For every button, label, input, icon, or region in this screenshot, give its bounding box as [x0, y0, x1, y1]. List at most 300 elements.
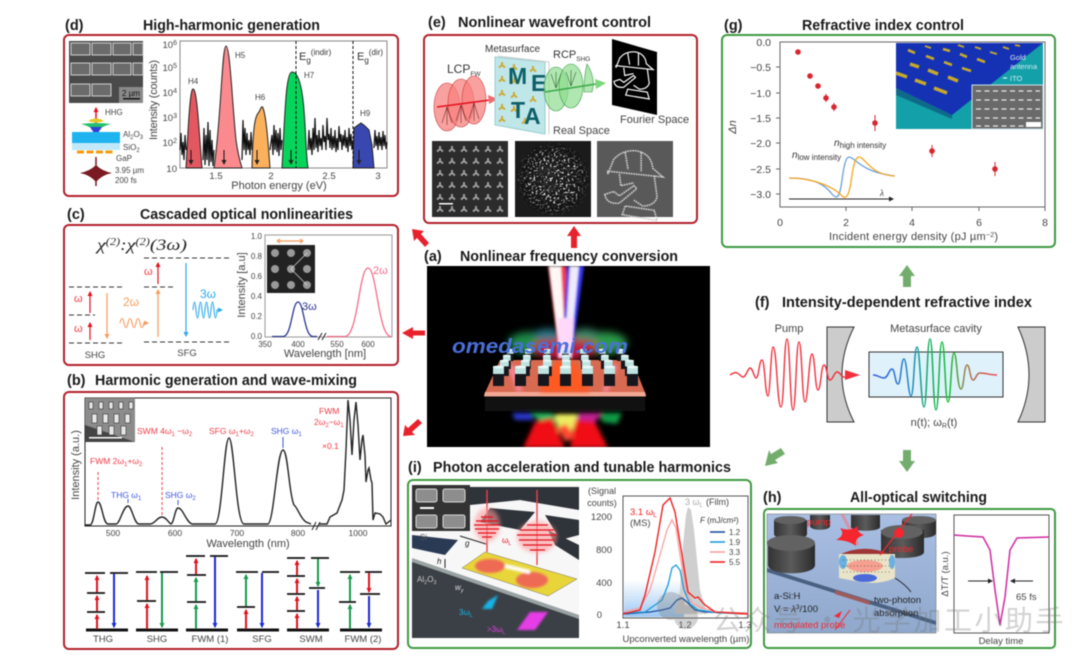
wave-mixing spectrum chart: −ω	[329, 417, 341, 427]
panel e: nonlinear wavefront control: Metasurface	[485, 44, 540, 55]
harmonic spectrum chart: 10	[163, 63, 173, 74]
wave-mixing spectrum chart: SWM 4ω	[137, 426, 172, 436]
panel h label: (h)	[763, 490, 782, 506]
wave-mixing spectrum chart: 500	[106, 528, 120, 538]
wave-mixing spectrum chart: ×0.1	[322, 441, 339, 451]
3-omega wave	[193, 302, 222, 318]
switching device render: probe	[889, 544, 913, 555]
substrate	[412, 560, 579, 638]
real space speckle image	[515, 141, 591, 217]
legend: 1.2	[729, 528, 741, 537]
delta-n chart: −2	[986, 232, 994, 239]
HHG device schematic: 2	[136, 148, 140, 154]
delta-n chart	[727, 37, 1048, 243]
harmonic spectrum chart: E	[357, 51, 364, 63]
switching device render: 3	[796, 604, 800, 611]
harmonic spectrum chart: 3	[375, 171, 381, 182]
panel g label: (g)	[724, 18, 743, 34]
metasurface render	[427, 266, 710, 448]
device render: y	[460, 588, 465, 594]
energy level diagram: ω	[74, 323, 83, 335]
energy level diagram	[69, 258, 231, 361]
harmonic spectrum chart: Intensity (counts)	[148, 60, 160, 140]
energy level diagram: ω	[144, 266, 153, 278]
wave-mixing spectrum chart: 1	[235, 432, 239, 438]
harmonic spectrum chart: (dir)	[369, 48, 383, 57]
signal chart: Upconverted wavelength (µm)	[623, 634, 749, 645]
device render: L	[508, 541, 511, 547]
wave-mixing spectrum chart: +ω	[127, 456, 139, 466]
cascaded spectrum chart: 0.4	[251, 292, 263, 301]
chi formula: (2)	[135, 237, 151, 248]
transition level diagrams: SHG	[147, 634, 167, 645]
transmission chart	[940, 515, 1049, 647]
signal chart: L	[700, 503, 704, 509]
device render: O	[427, 575, 433, 584]
cut-away field map	[839, 549, 895, 583]
wave-mixing spectrum chart: 1	[298, 432, 302, 438]
right mirror	[1018, 327, 1045, 422]
wave-mixing spectrum chart: 800	[291, 528, 305, 538]
panel c frame	[64, 225, 398, 365]
metasurface slab: T	[511, 97, 525, 123]
legend	[700, 516, 741, 567]
plate	[462, 552, 577, 596]
waveguide	[767, 568, 936, 625]
panel e label: (e)	[428, 15, 446, 31]
level dashes	[85, 556, 382, 612]
wave-mixing spectrum chart: 1000	[349, 528, 368, 538]
SEM inset on antenna image	[972, 85, 1043, 129]
harmonic spectrum chart: E	[299, 51, 306, 63]
delta-n chart: −1.0	[750, 88, 771, 100]
harmonic spectrum chart: 6	[173, 40, 177, 47]
device render: Al	[417, 575, 424, 584]
HHG device schematic: 3	[140, 135, 144, 141]
resonance curves inset: n	[834, 138, 840, 149]
harmonic spectrum chart: g	[364, 56, 369, 65]
chi formula: (2)	[106, 237, 121, 248]
signal chart: 800	[596, 545, 612, 556]
peak H9	[353, 123, 374, 168]
delta-n chart: 8	[1042, 217, 1048, 229]
pink curve 3.3	[623, 520, 748, 613]
switching device render	[767, 514, 936, 633]
panel f: intensity-dependent refractive index: Metasurface cavity	[890, 323, 982, 335]
harmonic spectrum chart: 4	[173, 88, 177, 95]
panel b label: (b)	[67, 373, 86, 389]
switching device render: modulated probe	[774, 620, 845, 631]
spectrum trace	[85, 400, 391, 525]
wave-mixing spectrum chart: −ω	[175, 426, 189, 436]
panel e: nonlinear wavefront control: Fourier Space	[620, 114, 689, 126]
dark blue curve 1.2	[623, 598, 748, 614]
transmission chart: Delay time	[979, 636, 1023, 647]
transition level diagrams: FWM (1)	[192, 634, 228, 645]
red LCP helix	[434, 76, 498, 131]
harmonic spectrum chart	[148, 40, 387, 192]
switching device render: pump	[807, 517, 831, 528]
metasurface slab	[495, 56, 549, 134]
delta-n chart: 0	[777, 217, 783, 229]
panel f: intensity-dependent refractive index: R	[942, 423, 947, 430]
signal chart: L	[653, 512, 657, 519]
panel h: all-optical switching	[763, 490, 1055, 648]
panel c label: (c)	[67, 207, 85, 223]
SEM of tripod array	[432, 141, 508, 217]
panel h heading: All-optical switching	[850, 490, 987, 506]
device render: Si	[420, 533, 427, 542]
HHG device schematic: Al	[123, 130, 130, 139]
wave-mixing spectrum chart: 2	[325, 423, 329, 429]
arrow to panel h	[899, 450, 915, 472]
peak H7	[282, 72, 308, 168]
HHG device schematic: HHG	[105, 108, 123, 117]
antenna array inset: antenna	[1010, 62, 1038, 71]
signal chart: 0	[597, 610, 602, 621]
panel e: nonlinear wavefront control: LCP	[447, 62, 470, 76]
device render: L	[502, 630, 505, 636]
substrate top plate	[484, 360, 646, 395]
harmonic spectrum chart: (indir)	[311, 48, 332, 57]
antenna array inset	[896, 43, 1043, 129]
signal chart	[587, 486, 752, 645]
wave-mixing spectrum chart: 1	[124, 462, 128, 468]
chi formula: :χ	[120, 237, 137, 254]
delta-n chart: 0.0	[756, 37, 771, 49]
left mirror	[827, 327, 854, 422]
panel d frame	[64, 35, 398, 196]
3-omega peak	[272, 302, 317, 336]
harmonic spectrum chart: H5	[235, 51, 246, 60]
HHG device schematic	[72, 108, 144, 186]
device render: 3ω	[459, 608, 470, 617]
signal chart: 3.1 ω	[630, 507, 653, 518]
cylinders	[768, 515, 936, 573]
rainbow diffraction below	[512, 413, 622, 448]
HHG device schematic: SiO	[123, 143, 136, 152]
signal chart: 1.1	[616, 620, 630, 631]
delta-n chart: −2.0	[750, 138, 771, 150]
harmonic spectrum chart: Photon energy (eV)	[231, 180, 327, 192]
device render: 2	[424, 580, 427, 586]
resonance curves inset: high intensity	[840, 141, 886, 150]
panel i heading: Photon acceleration and tunable harmonics	[433, 460, 731, 476]
legend: 5.5	[729, 558, 741, 567]
harmonic spectrum chart: 5	[173, 63, 177, 70]
background dark slabs	[412, 487, 579, 560]
pump and probe pulses	[834, 514, 912, 630]
arrow to panel b	[403, 419, 422, 436]
harmonic spectrum chart: 10	[166, 164, 177, 175]
peak H4	[186, 89, 202, 168]
wave-mixing spectrum chart: Intensity (a.u.)	[70, 430, 82, 500]
device render: h	[437, 557, 442, 566]
cascaded spectrum chart	[236, 232, 392, 360]
resonance curves inset: λ	[879, 188, 884, 198]
panel g heading: Refractive index control	[802, 18, 964, 34]
panel d label: (d)	[65, 18, 84, 34]
real space speckle image: ME	[538, 164, 558, 179]
arrow to panel i	[765, 448, 785, 466]
arrow to panel e	[567, 226, 581, 248]
SHG arrows	[147, 573, 162, 629]
harmonic spectrum chart: H6	[255, 93, 266, 102]
SEM inset	[412, 485, 470, 531]
harmonic spectrum chart: 3	[173, 113, 177, 120]
delta-n chart: −2.5	[750, 164, 771, 176]
switching device render: two-photon	[874, 595, 921, 606]
harmonic spectrum chart: 10	[163, 138, 173, 149]
device render: L	[470, 613, 473, 619]
legend: 1.9	[729, 538, 741, 547]
signal chart: counts)	[587, 498, 617, 508]
panel g frame	[722, 35, 1055, 247]
delta-n chart: Δn	[727, 120, 739, 135]
antenna array inset: Gold	[1010, 53, 1026, 62]
device render: w	[455, 583, 461, 592]
wave-mixing spectrum chart: +ω	[239, 426, 251, 436]
chi formula: (3ω)	[150, 237, 187, 254]
switching device render: V = λ	[774, 604, 796, 615]
legend: 3.3	[729, 548, 741, 557]
HHG device schematic: 2	[130, 135, 134, 141]
level ground lines	[86, 628, 382, 632]
panel e: nonlinear wavefront control: FW	[470, 71, 481, 78]
SEM image: 2 µm	[122, 89, 140, 98]
panel d: high-harmonic generation	[64, 18, 398, 196]
panel f label: (f)	[755, 295, 770, 311]
FWM 1 arrows	[196, 557, 215, 629]
energy level diagram: SFG	[177, 348, 197, 359]
signal chart: 3 ω	[685, 497, 700, 507]
transition level diagrams: THG	[93, 634, 113, 645]
red beams and pulses	[474, 490, 557, 565]
panel f: intensity-dependent refractive index: Pump	[775, 323, 803, 335]
signal chart: (MS)	[630, 518, 651, 529]
panel i frame	[408, 480, 751, 648]
data points	[795, 49, 998, 172]
wave-mixing spectrum chart: 2	[189, 432, 193, 438]
SWM arrows	[297, 559, 318, 629]
transmission chart: 65 fs	[1016, 592, 1037, 603]
arrow to panel c	[402, 327, 425, 339]
panel h frame	[764, 509, 1055, 648]
metasurface slab: E	[531, 70, 546, 96]
peak H6	[252, 107, 270, 168]
wave-mixing spectrum chart: 2	[139, 462, 143, 468]
energy level diagram: SHG	[85, 350, 105, 361]
panel b frame	[64, 392, 398, 649]
HHG device schematic: O	[133, 130, 140, 139]
energy level diagram: 2ω	[123, 295, 139, 309]
panel b: harmonic generation and wave-mixing	[64, 373, 398, 649]
cascaded spectrum chart: 0.8	[251, 252, 263, 261]
panel f: intensity-dependent refractive index	[730, 295, 1045, 430]
transition level diagrams: SFG	[252, 634, 272, 645]
wave-mixing spectrum chart: 1	[172, 432, 176, 438]
panel i label: (i)	[408, 460, 422, 476]
metasurface slab: M	[508, 63, 527, 89]
device render	[412, 485, 579, 638]
device render: >3ω	[487, 625, 502, 634]
THG arrows	[97, 574, 114, 629]
FWM 2 arrows	[350, 573, 369, 629]
Fourier space worker panel	[612, 39, 657, 115]
red arrows into panel a	[402, 226, 581, 436]
signal chart: 400	[596, 578, 612, 589]
harmonic spectrum chart: H4	[188, 77, 199, 86]
harmonic spectrum chart: H7	[304, 71, 315, 80]
device render: ω	[502, 536, 508, 545]
panel g: refractive index control	[722, 18, 1055, 247]
watermark: WeChat account: 公众号 · 光学加工小助手	[713, 599, 1066, 639]
panel a heading: Nonlinear frequency conversion	[460, 249, 678, 265]
green RCP helix	[544, 64, 606, 111]
delta-n chart: 2	[843, 217, 849, 229]
harmonic spectrum chart: 2.5	[322, 171, 336, 182]
panel a: nonlinear frequency conversion	[424, 249, 710, 448]
wave-mixing spectrum chart: 2	[192, 496, 196, 502]
back pillar rows	[500, 349, 634, 376]
cascaded spectrum chart: 550	[330, 340, 344, 349]
SEM image	[69, 41, 143, 103]
peak H5	[214, 46, 242, 168]
cascaded spectrum chart: Intensity [a.u]	[236, 252, 248, 318]
panel d heading: High-harmonic generation	[143, 18, 320, 34]
panel f heading: Intensity-dependent refractive index	[782, 295, 1032, 311]
harmonic spectrum chart: 2	[268, 171, 274, 182]
noise floor	[180, 118, 387, 166]
transition level diagrams: FWM (2)	[345, 634, 381, 645]
resonance curves inset	[789, 138, 895, 199]
panel f: intensity-dependent refractive index: n(t); ω	[911, 417, 942, 429]
panel i: photon acceleration and tunable harmonics	[408, 460, 752, 648]
cascaded spectrum chart: 1.0	[251, 232, 263, 241]
signal chart: 1.2	[678, 620, 692, 631]
arrow to panel g	[899, 265, 915, 287]
panel c heading: Cascaded optical nonlinearities	[140, 207, 353, 223]
signal chart: (Film)	[706, 497, 729, 507]
wave-mixing spectrum chart	[70, 398, 391, 550]
panel e: nonlinear wavefront control: RCP	[553, 49, 576, 61]
panel e: nonlinear wavefront control	[424, 15, 697, 223]
wave-mixing spectrum chart: FWM	[319, 406, 339, 416]
harmonic spectrum chart: H9	[360, 109, 371, 118]
harmonic spectrum chart: 1.5	[209, 171, 223, 182]
front pillar row	[493, 366, 638, 386]
film reference peak	[675, 507, 707, 614]
HHG device schematic: 200 fs	[115, 176, 137, 185]
switching device render: a-Si:H	[774, 591, 801, 602]
cascaded spectrum chart: 3ω	[302, 301, 317, 313]
transition level diagrams	[85, 556, 382, 645]
harmonic spectrum chart: 10	[163, 113, 173, 124]
delta-n chart: 6	[976, 217, 982, 229]
panel b heading: Harmonic generation and wave-mixing	[95, 373, 357, 389]
panel e: nonlinear wavefront control: SHG	[576, 56, 590, 63]
panel e: nonlinear wavefront control: Real Space	[553, 125, 610, 137]
delta-n chart: −0.5	[750, 62, 771, 74]
green arrows around panel f	[765, 265, 915, 472]
legend: F (mJ/cm²)	[700, 516, 739, 525]
device render: g	[465, 539, 470, 548]
wave-mixing spectrum chart: THG ω	[111, 490, 138, 500]
nanostructure inset	[267, 245, 315, 293]
harmonic spectrum chart: 10	[163, 88, 173, 99]
panel e frame	[424, 35, 697, 223]
cascaded spectrum chart: 0.2	[251, 312, 263, 321]
metasurface slab: A	[524, 103, 541, 129]
2-omega peak	[327, 268, 391, 336]
panel a label: (a)	[424, 249, 442, 265]
wave-mixing spectrum chart: 700	[230, 528, 244, 538]
panel e heading: Nonlinear wavefront control	[458, 15, 651, 31]
incident and emitted beams	[548, 266, 584, 358]
cascaded spectrum chart: Wavelength [nm]	[284, 348, 366, 360]
wave-mixing spectrum chart: Wavelength (nm)	[206, 538, 290, 550]
harmonic spectrum chart: g	[306, 56, 311, 65]
wave-mixing spectrum chart: FWM 2ω	[90, 456, 124, 466]
switching device render: /100	[799, 604, 818, 615]
wave-mixing spectrum chart: 600	[168, 528, 182, 538]
cascaded spectrum chart: 2ω	[373, 265, 388, 277]
HHG device schematic: 3.95 µm	[115, 166, 144, 175]
SEM inset	[85, 398, 135, 442]
delta-n chart: 4	[909, 217, 915, 229]
panel f: intensity-dependent refractive index: (t)	[947, 417, 957, 429]
wechat icon	[657, 592, 698, 629]
iridescent glow above surface	[508, 329, 627, 360]
device render: 3	[433, 580, 436, 586]
switching device render: absorption	[874, 608, 918, 619]
resonance curves inset: n	[792, 150, 798, 161]
transmission chart: ΔT/T (a.u.)	[940, 551, 951, 597]
signal chart: 1.3	[738, 620, 752, 631]
cascaded spectrum chart: 400	[291, 340, 305, 349]
panel c: cascaded optical nonlinearities	[64, 207, 398, 365]
blue curve 1.9	[623, 565, 748, 613]
wave-mixing spectrum chart: SHG ω	[271, 426, 298, 436]
wave-mixing spectrum chart: 1	[138, 496, 142, 502]
HHG device schematic: GaP	[116, 154, 132, 163]
resonance curves inset: low intensity	[798, 153, 841, 162]
signal chart: 1200	[591, 512, 612, 523]
delta-n chart: −1.5	[750, 113, 771, 125]
antenna array inset: ITO	[1010, 74, 1023, 83]
wave-mixing spectrum chart: 2	[250, 432, 254, 438]
watermark: site name: omedasemi.com	[452, 336, 628, 358]
cascaded spectrum chart: 0.0	[251, 332, 263, 341]
cascaded spectrum chart: 0.6	[251, 272, 263, 281]
wave-mixing spectrum chart: 1	[340, 423, 344, 429]
real space speckle image: TA	[541, 180, 558, 195]
wave-mixing spectrum chart: SHG ω	[165, 490, 192, 500]
pump pulse	[730, 339, 858, 410]
wave-mixing spectrum chart: SFG ω	[209, 426, 235, 436]
transition level diagrams: SWM	[299, 634, 323, 645]
cavity pulse	[873, 339, 997, 410]
cascaded spectrum chart: 350	[258, 340, 272, 349]
chi formula: χ	[97, 237, 104, 254]
cascaded spectrum chart: 600	[361, 340, 375, 349]
Fourier space image	[597, 141, 673, 220]
cavity box	[869, 352, 1003, 397]
wave-mixing spectrum chart: 2ω	[314, 417, 325, 427]
SFG arrows	[246, 573, 262, 629]
harmonic spectrum chart: 2	[173, 138, 177, 145]
arrow to panel d	[412, 229, 429, 247]
